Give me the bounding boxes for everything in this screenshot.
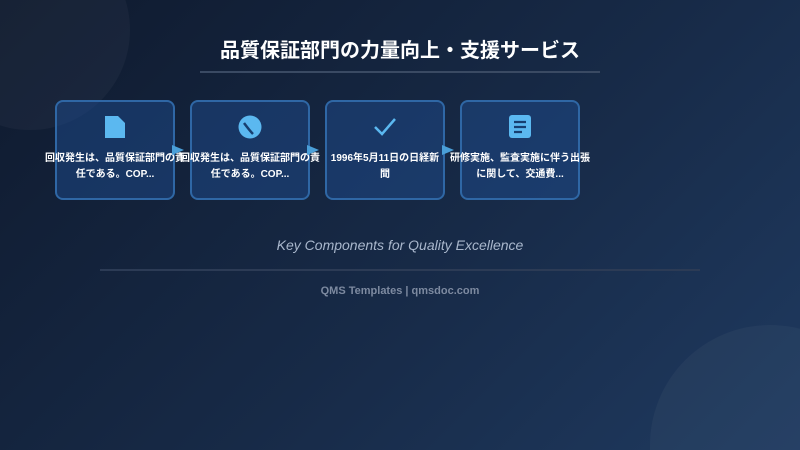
decorative circle top-left <box>0 0 130 130</box>
icon: list <box>509 115 531 138</box>
panel: step 2 <box>190 100 310 200</box>
arrow 2 <box>307 145 319 155</box>
text 1: 回収発生は、品質保証部門の責任である。COP... <box>45 153 185 180</box>
footer: QMS Templates | qmsdoc.com <box>321 285 479 297</box>
title: 品質保証部門の力量向上・支援サービス <box>220 40 580 62</box>
icon: check <box>374 118 396 136</box>
icon: circle <box>238 116 262 138</box>
subtitle: Key Components for Quality Excellence <box>277 237 523 253</box>
decorative circle bottom-right <box>650 325 800 450</box>
icon: document <box>105 116 125 138</box>
panel: step 4 <box>460 100 580 200</box>
title underline <box>200 71 600 73</box>
footer divider <box>100 269 700 271</box>
text 2: 回収発生は、品質保証部門の責任である。COP... <box>180 153 320 180</box>
text 4: 研修実施、監査実施に伴う出張に関して、交通費... <box>450 153 590 180</box>
arrow 3 <box>442 145 454 155</box>
arrow 1 <box>172 145 184 155</box>
text 3: 1996年5月11日の日経新聞 <box>331 153 439 180</box>
panel: step 3 <box>325 100 445 200</box>
panel: step 1 <box>55 100 175 200</box>
